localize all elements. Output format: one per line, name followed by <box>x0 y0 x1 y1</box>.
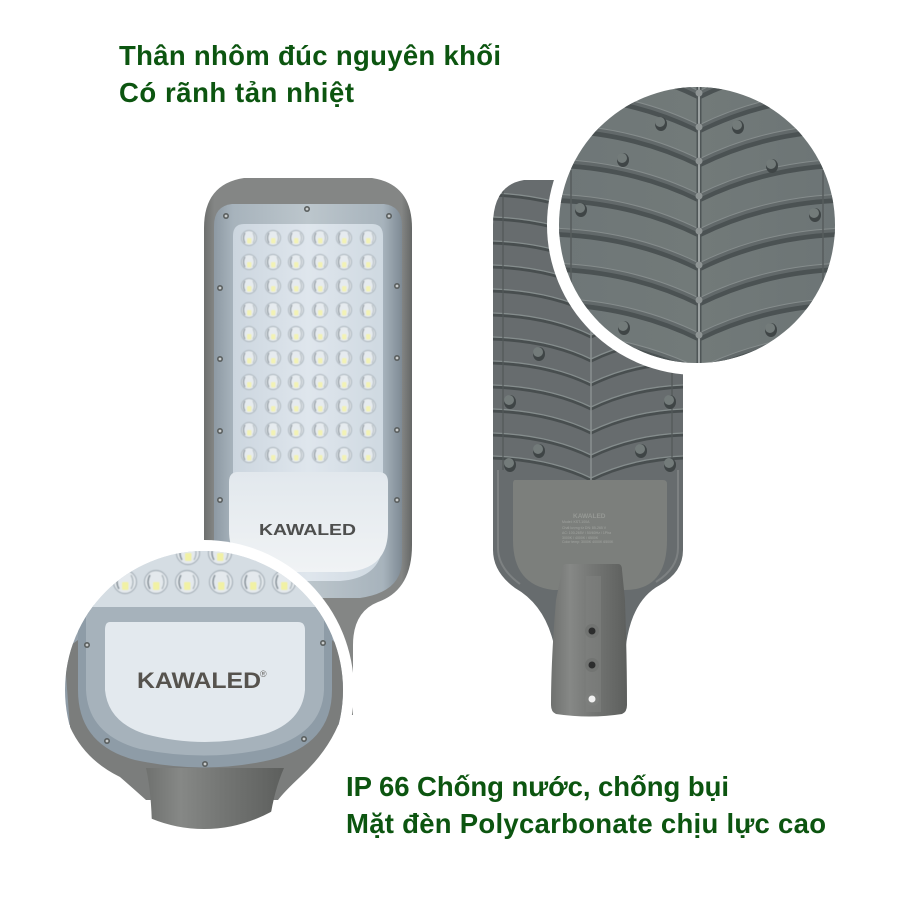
enlarged cover <box>105 622 305 742</box>
plate label: Model: KST-100A <box>562 520 590 524</box>
driver cover with logo <box>229 472 388 572</box>
driver plate <box>513 480 667 590</box>
cooling ribs <box>493 180 683 480</box>
enlarged neck <box>146 768 284 835</box>
plate label <box>562 513 614 544</box>
zoom circle: driver cover detail <box>54 540 354 840</box>
rear body <box>493 180 683 680</box>
mounting neck <box>551 564 627 716</box>
heading: top caption <box>119 40 501 108</box>
enlarged panel <box>92 554 316 607</box>
rib pins <box>504 347 676 472</box>
heading: bottom caption <box>346 771 826 839</box>
glass frame <box>214 204 402 598</box>
enlarged logo: KAWALED: KAWALED <box>137 668 261 693</box>
heading: top caption: Thân nhôm đúc nguyên khối <box>119 40 501 71</box>
LED panel <box>233 224 383 581</box>
plate label: 3000K / 4000K / 6500K <box>562 536 599 540</box>
zoom circle: driver cover detail: ® <box>260 669 267 679</box>
heading: top caption: Có rãnh tản nhiệt <box>119 77 354 108</box>
mounting holes <box>585 624 599 706</box>
enlarged body <box>64 640 345 800</box>
frame screws <box>217 206 400 503</box>
zoom circle: cooling ribs detail <box>547 87 835 374</box>
plate label: Chất lượng từ DN: 85-265 V <box>562 526 607 530</box>
enlarged LEDs <box>113 551 296 594</box>
LED grid <box>242 230 376 462</box>
plate label: Color temp: 3000K 4000K 6500K <box>562 540 614 544</box>
heading: bottom caption: IP 66 Chống nước, chống bụi <box>346 771 729 802</box>
enlarged screws <box>84 642 90 648</box>
front view of street lamp <box>204 178 412 715</box>
plate label: KAWALED <box>573 513 606 520</box>
plate label: AC: 100-265V / 50/60Hz / 1Pha <box>562 531 611 535</box>
heading: bottom caption: Mặt đèn Polycarbonate chịu lực cao <box>346 808 826 839</box>
enlarged upper panel background <box>60 545 350 725</box>
white ring <box>54 540 354 840</box>
lamp body front <box>204 178 412 715</box>
white ring <box>547 75 847 375</box>
rear view of street lamp <box>493 180 683 716</box>
logo: KAWALED: KAWALED <box>259 522 356 539</box>
enlarged frame <box>78 605 332 768</box>
